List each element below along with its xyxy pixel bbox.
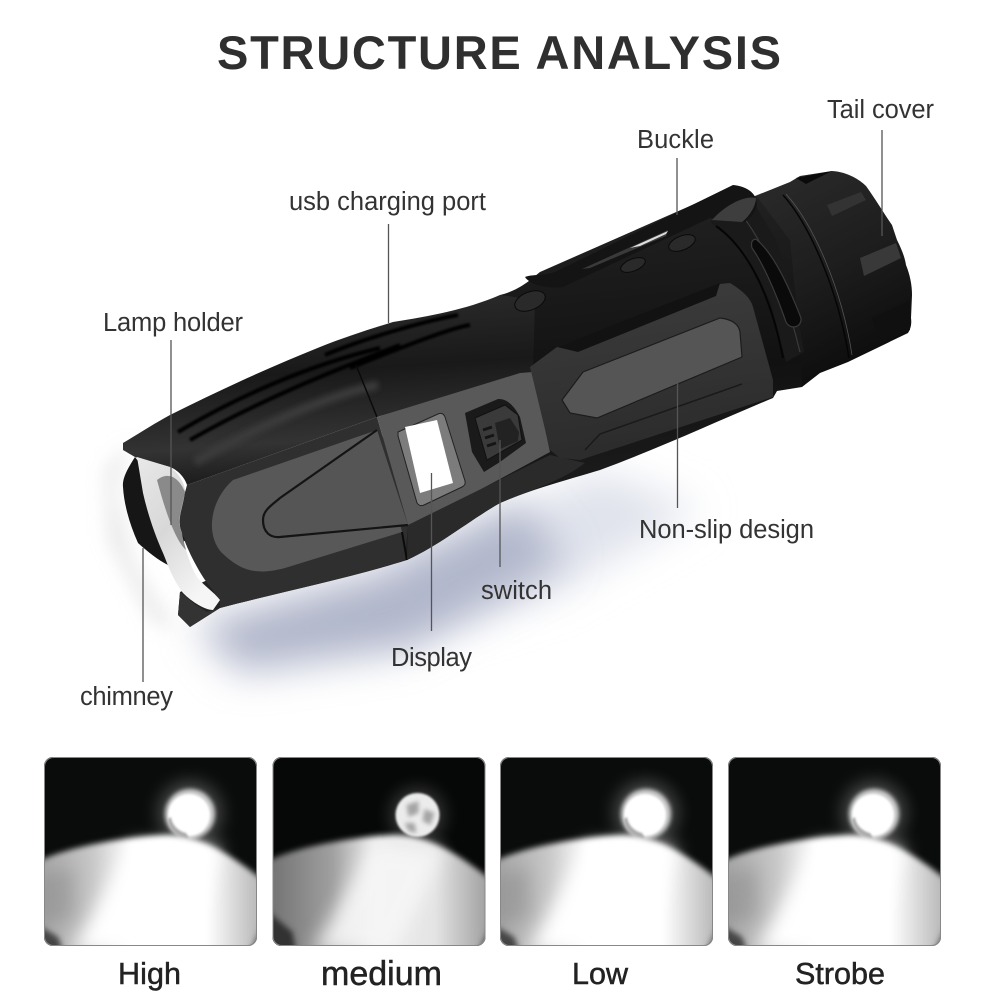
flashlight body xyxy=(178,187,802,627)
flashlight tail cap xyxy=(745,171,912,387)
caption: strobe: Strobe xyxy=(795,957,885,991)
caption: high: High xyxy=(118,957,181,991)
flashlight head xyxy=(123,295,535,485)
pocket clip buckle xyxy=(525,185,757,288)
label: switch: switch xyxy=(481,577,552,605)
label: buckle xyxy=(637,126,714,215)
switch xyxy=(465,399,526,472)
mode photo: strobe xyxy=(718,757,950,953)
screw dimples xyxy=(512,231,698,315)
label: chimney: chimney xyxy=(80,683,173,711)
caption: medium: medium xyxy=(321,955,442,993)
lower head panel xyxy=(180,417,408,608)
lens chimney xyxy=(137,457,220,610)
display screen xyxy=(398,413,465,506)
flashlight shadow xyxy=(105,440,700,672)
label: tail cover: Tail cover xyxy=(827,96,934,124)
display panel band xyxy=(377,372,550,525)
mode photo: low xyxy=(490,757,722,953)
non-slip grip xyxy=(530,283,773,460)
label: lamp holder: Lamp holder xyxy=(103,309,244,337)
label: non-slip design: Non-slip design xyxy=(639,516,814,544)
mode photo: medium xyxy=(262,757,494,953)
label: buckle: Buckle xyxy=(637,126,714,154)
mode photo: high xyxy=(34,757,266,953)
flashlight xyxy=(123,171,912,627)
label: usb charging port: usb charging port xyxy=(289,188,486,216)
title: STRUCTURE ANALYSIS xyxy=(217,26,781,79)
black bezel xyxy=(123,457,185,565)
caption: low: Low xyxy=(572,957,629,991)
collar with slot xyxy=(710,205,804,362)
label: tail cover xyxy=(827,96,934,236)
bottom lip xyxy=(178,592,220,627)
label: display: Display xyxy=(391,644,472,672)
lower body strip xyxy=(407,455,585,560)
